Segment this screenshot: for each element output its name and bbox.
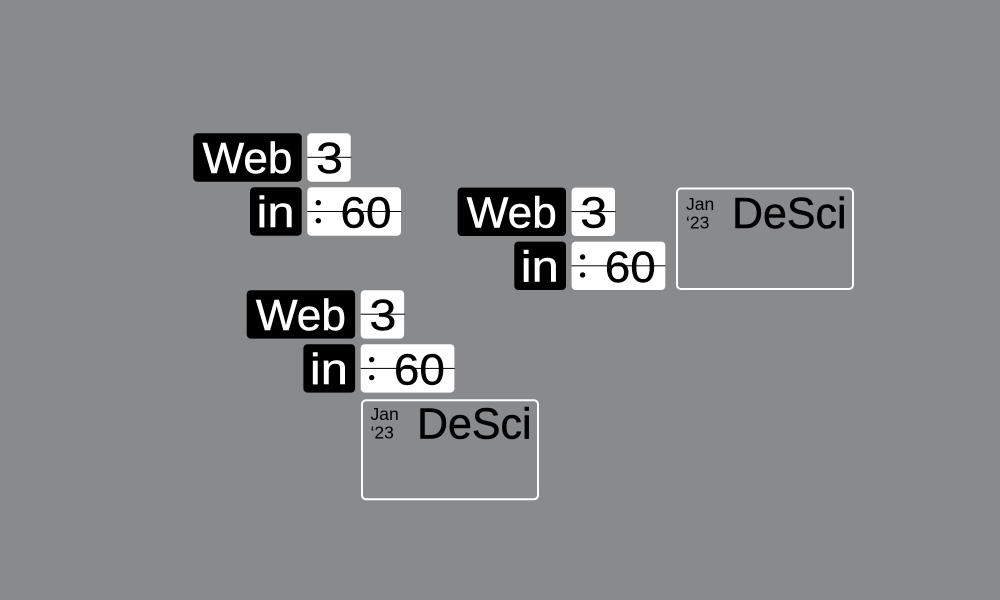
label: : 60: 60 [340, 188, 392, 238]
label: in [250, 187, 302, 237]
label: : 60 [572, 242, 666, 292]
label: in: in [521, 242, 559, 291]
label: 3: 3 [369, 291, 396, 340]
date: Jan [686, 194, 714, 214]
label: : 60 [361, 344, 455, 394]
label: in [303, 344, 355, 394]
lockup: Web 3 in : 60 (lower) [247, 290, 455, 394]
label: in [514, 242, 566, 291]
card: Jan '23 DeSci (right) [677, 188, 853, 289]
label: in: in [256, 188, 294, 237]
label: 3: 3 [316, 134, 343, 183]
label: : 60: 60 [394, 345, 445, 394]
label: 3 [572, 188, 616, 237]
label: : 60: 60 [605, 243, 656, 292]
date: Jan [370, 404, 399, 424]
label: Web: Web [467, 188, 557, 237]
label: 3 [307, 133, 351, 183]
label: 3 [361, 290, 405, 340]
topic: DeSci: DeSci [417, 400, 532, 448]
lockup: Web 3 in : 60 (top left) [193, 133, 401, 238]
lockup: Web 3 in : 60 (top right) [458, 188, 666, 292]
label: Web: Web [202, 134, 292, 183]
label: 3: 3 [580, 188, 607, 237]
label: in: in [310, 345, 348, 394]
topic: DeSci: DeSci [732, 189, 846, 238]
date: ‘23 [686, 212, 709, 232]
date: ‘23 [370, 422, 394, 442]
label: Web: Web [256, 291, 346, 340]
label: : 60 [307, 187, 401, 238]
card: Jan '23 DeSci (lower) [362, 400, 538, 499]
